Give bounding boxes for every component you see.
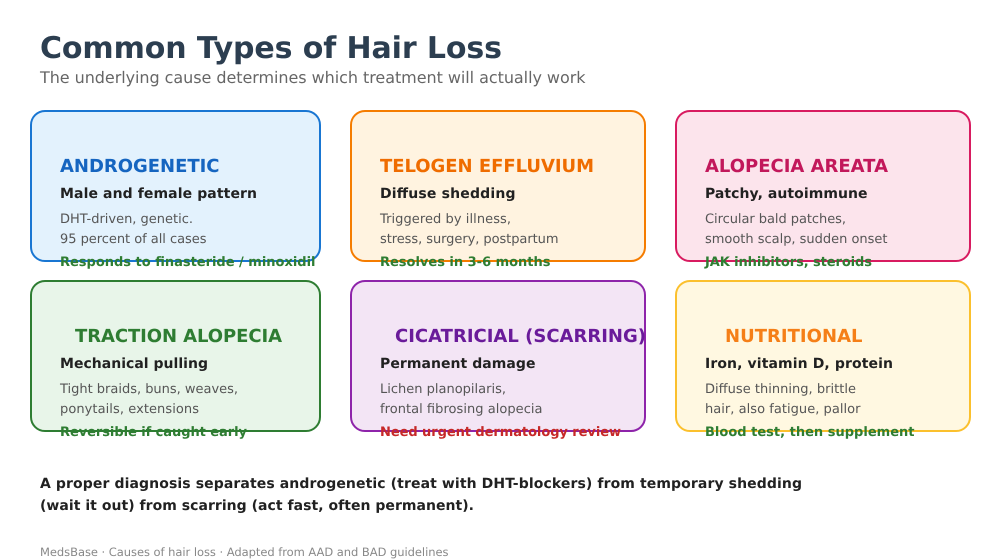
panel: androgenetic: Male and female pattern bbox=[60, 186, 257, 202]
panel: cicatricial: frontal fibrosing alopecia bbox=[380, 402, 542, 417]
panel: nutritional bbox=[676, 281, 970, 440]
panel: telogen effluvium: Triggered by illness, bbox=[379, 212, 511, 227]
panel: cicatricial: Need urgent dermatology review bbox=[380, 425, 621, 440]
panel: alopecia areata: smooth scalp, sudden onset bbox=[705, 232, 888, 247]
subtitle: The underlying cause determines which treatment will actually work bbox=[39, 68, 586, 87]
panel: cicatricial: CICATRICIAL (SCARRING) bbox=[395, 326, 646, 347]
panel: cicatricial bbox=[351, 281, 646, 440]
panel: telogen effluvium: TELOGEN EFFLUVIUM bbox=[380, 156, 594, 177]
panel: androgenetic: DHT-driven, genetic. bbox=[60, 212, 193, 227]
panel: cicatricial: Permanent damage bbox=[380, 356, 536, 372]
panel: telogen effluvium bbox=[351, 111, 645, 270]
panel: nutritional: hair, also fatigue, pallor bbox=[705, 402, 861, 417]
panel: alopecia areata: JAK inhibitors, steroids bbox=[704, 255, 872, 270]
panel: alopecia areata: Circular bald patches, bbox=[705, 212, 846, 227]
footer: MedsBase · Causes of hair loss · Adapted from AAD and BAD guidelines bbox=[40, 545, 448, 559]
panel: traction alopecia: Mechanical pulling bbox=[60, 356, 208, 372]
panel: nutritional: NUTRITIONAL bbox=[725, 326, 862, 347]
panel: nutritional: Diffuse thinning, brittle bbox=[705, 382, 856, 397]
panel: androgenetic: Responds to finasteride / minoxidil bbox=[60, 255, 316, 270]
panel: alopecia areata bbox=[676, 111, 970, 270]
panel: nutritional: Blood test, then supplement bbox=[705, 425, 914, 440]
panel: androgenetic: 95 percent of all cases bbox=[60, 232, 207, 247]
panel: traction alopecia bbox=[31, 281, 320, 440]
panel: traction alopecia: Tight braids, buns, weaves, bbox=[59, 382, 238, 397]
summary text: (wait it out) from scarring (act fast, often permanent). bbox=[40, 498, 474, 514]
panel: cicatricial: Lichen planopilaris, bbox=[380, 382, 506, 397]
panel: traction alopecia: TRACTION ALOPECIA bbox=[75, 326, 282, 347]
panel: alopecia areata: ALOPECIA AREATA bbox=[705, 156, 888, 177]
panel: telogen effluvium: Resolves in 3-6 months bbox=[380, 255, 551, 270]
summary text bbox=[40, 476, 802, 514]
panel: androgenetic bbox=[31, 111, 320, 270]
panel: telogen effluvium: Diffuse shedding bbox=[380, 186, 516, 202]
panel: nutritional: Iron, vitamin D, protein bbox=[705, 356, 893, 372]
panel: alopecia areata: Patchy, autoimmune bbox=[705, 186, 868, 202]
title: Common Types of Hair Loss bbox=[40, 31, 502, 66]
summary text: A proper diagnosis separates androgenetic (treat with DHT-blockers) from temporary shedding bbox=[40, 476, 802, 492]
panel: androgenetic: ANDROGENETIC bbox=[60, 156, 220, 177]
panel: traction alopecia: ponytails, extensions bbox=[60, 402, 199, 417]
panel: telogen effluvium: stress, surgery, postpartum bbox=[380, 232, 558, 247]
panel: traction alopecia: Reversible if caught early bbox=[60, 425, 248, 440]
